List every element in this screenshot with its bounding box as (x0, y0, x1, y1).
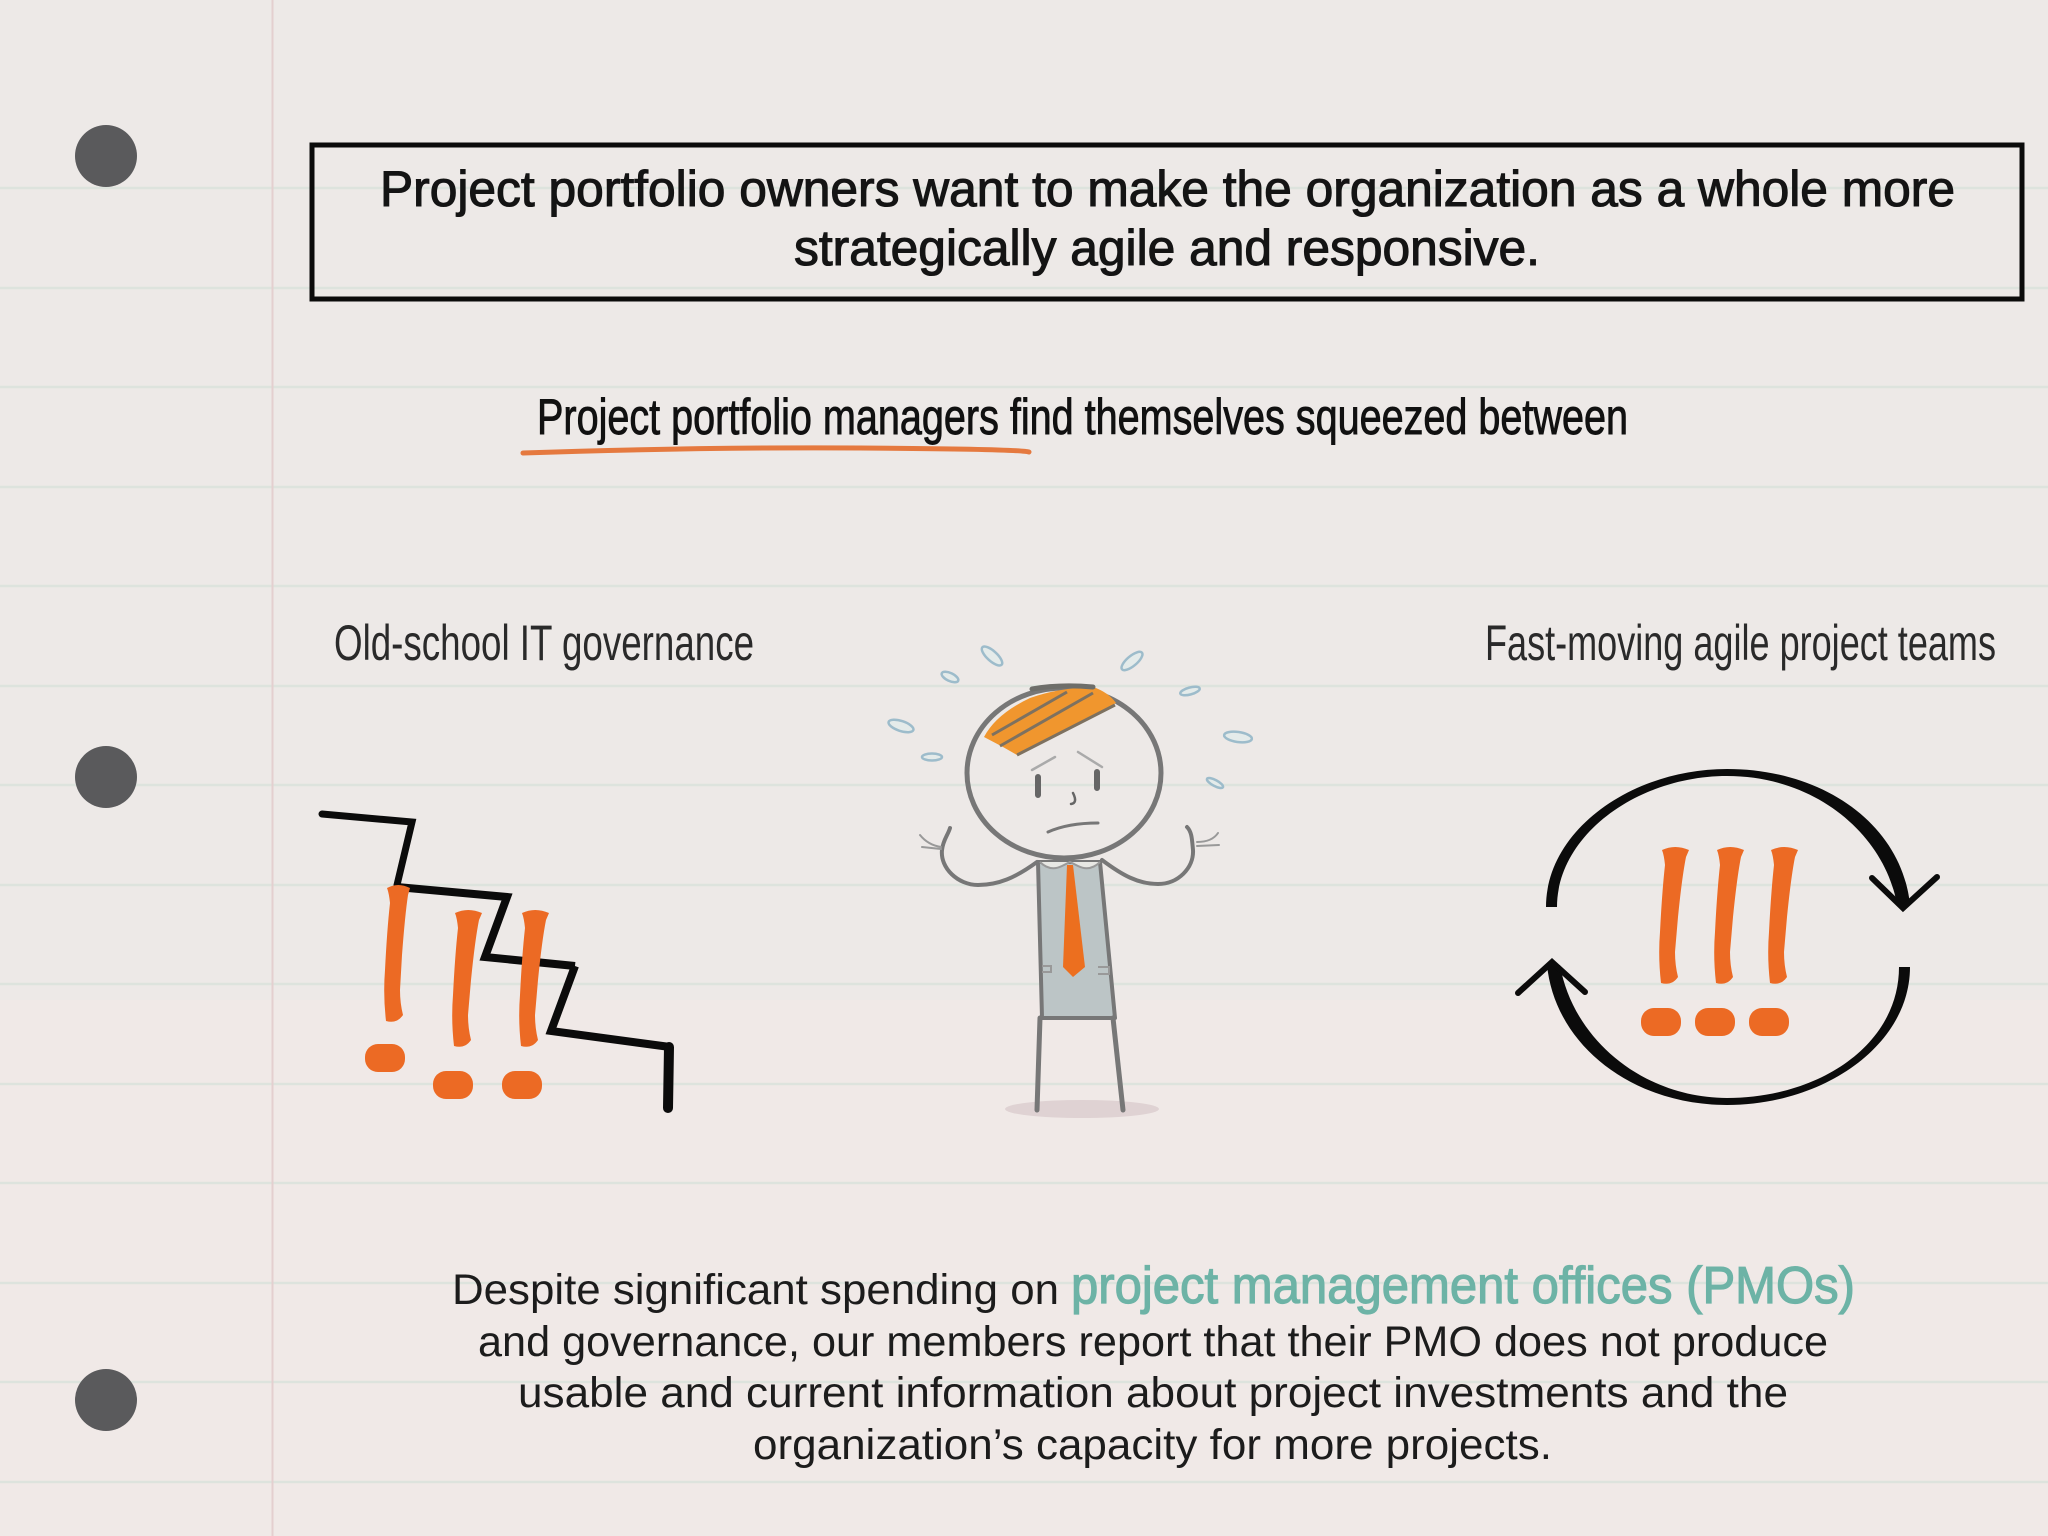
text block: PMO conclusion: and governance, our members report that their PMO does not produce (478, 1318, 1828, 1366)
text block: PMO conclusion: Despite significant spending on (452, 1266, 1059, 1314)
icon: staircase with exclamation marks (322, 814, 670, 1108)
sub-element: arms (942, 827, 1193, 885)
sub-element: legs (1037, 1018, 1123, 1110)
binder hole: bottom (75, 1369, 137, 1431)
text block: PMO conclusion: organization’s capacity for more projects. (753, 1421, 1552, 1469)
text block: PMO conclusion: project management offices (PMOs) (1071, 1257, 1855, 1315)
binder hole: top (75, 125, 137, 187)
sub-element: head (967, 688, 1161, 858)
illustration: stressed stick figure (887, 644, 1253, 1118)
sub-element: hand pockets (1042, 966, 1109, 974)
icon: cycle arrows with exclamation marks (1518, 769, 1937, 1105)
sub-element: collar (1040, 862, 1100, 868)
text block: PMO conclusion: usable and current information about project investments and the (518, 1369, 1788, 1417)
sub-element: hair (984, 687, 1116, 755)
sub-element: ground shadow (1005, 1100, 1159, 1118)
title box (312, 145, 2022, 299)
sub-element: tie (1063, 865, 1085, 977)
heading: squeezed between: Project portfolio managers find themselves squeezed between (537, 389, 1628, 445)
sub-element: sweat drops (887, 644, 1253, 790)
text block: PMO conclusion (452, 1257, 1855, 1469)
title box: Project portfolio owners want to make the organization as a whole more (380, 161, 1955, 217)
sub-element: face (1032, 752, 1102, 832)
label: old-school IT governance: Old-school IT governance (334, 615, 754, 671)
title box: strategically agile and responsive. (794, 220, 1540, 276)
sub-element: shirt (1038, 862, 1115, 1018)
binder hole: middle (75, 746, 137, 808)
